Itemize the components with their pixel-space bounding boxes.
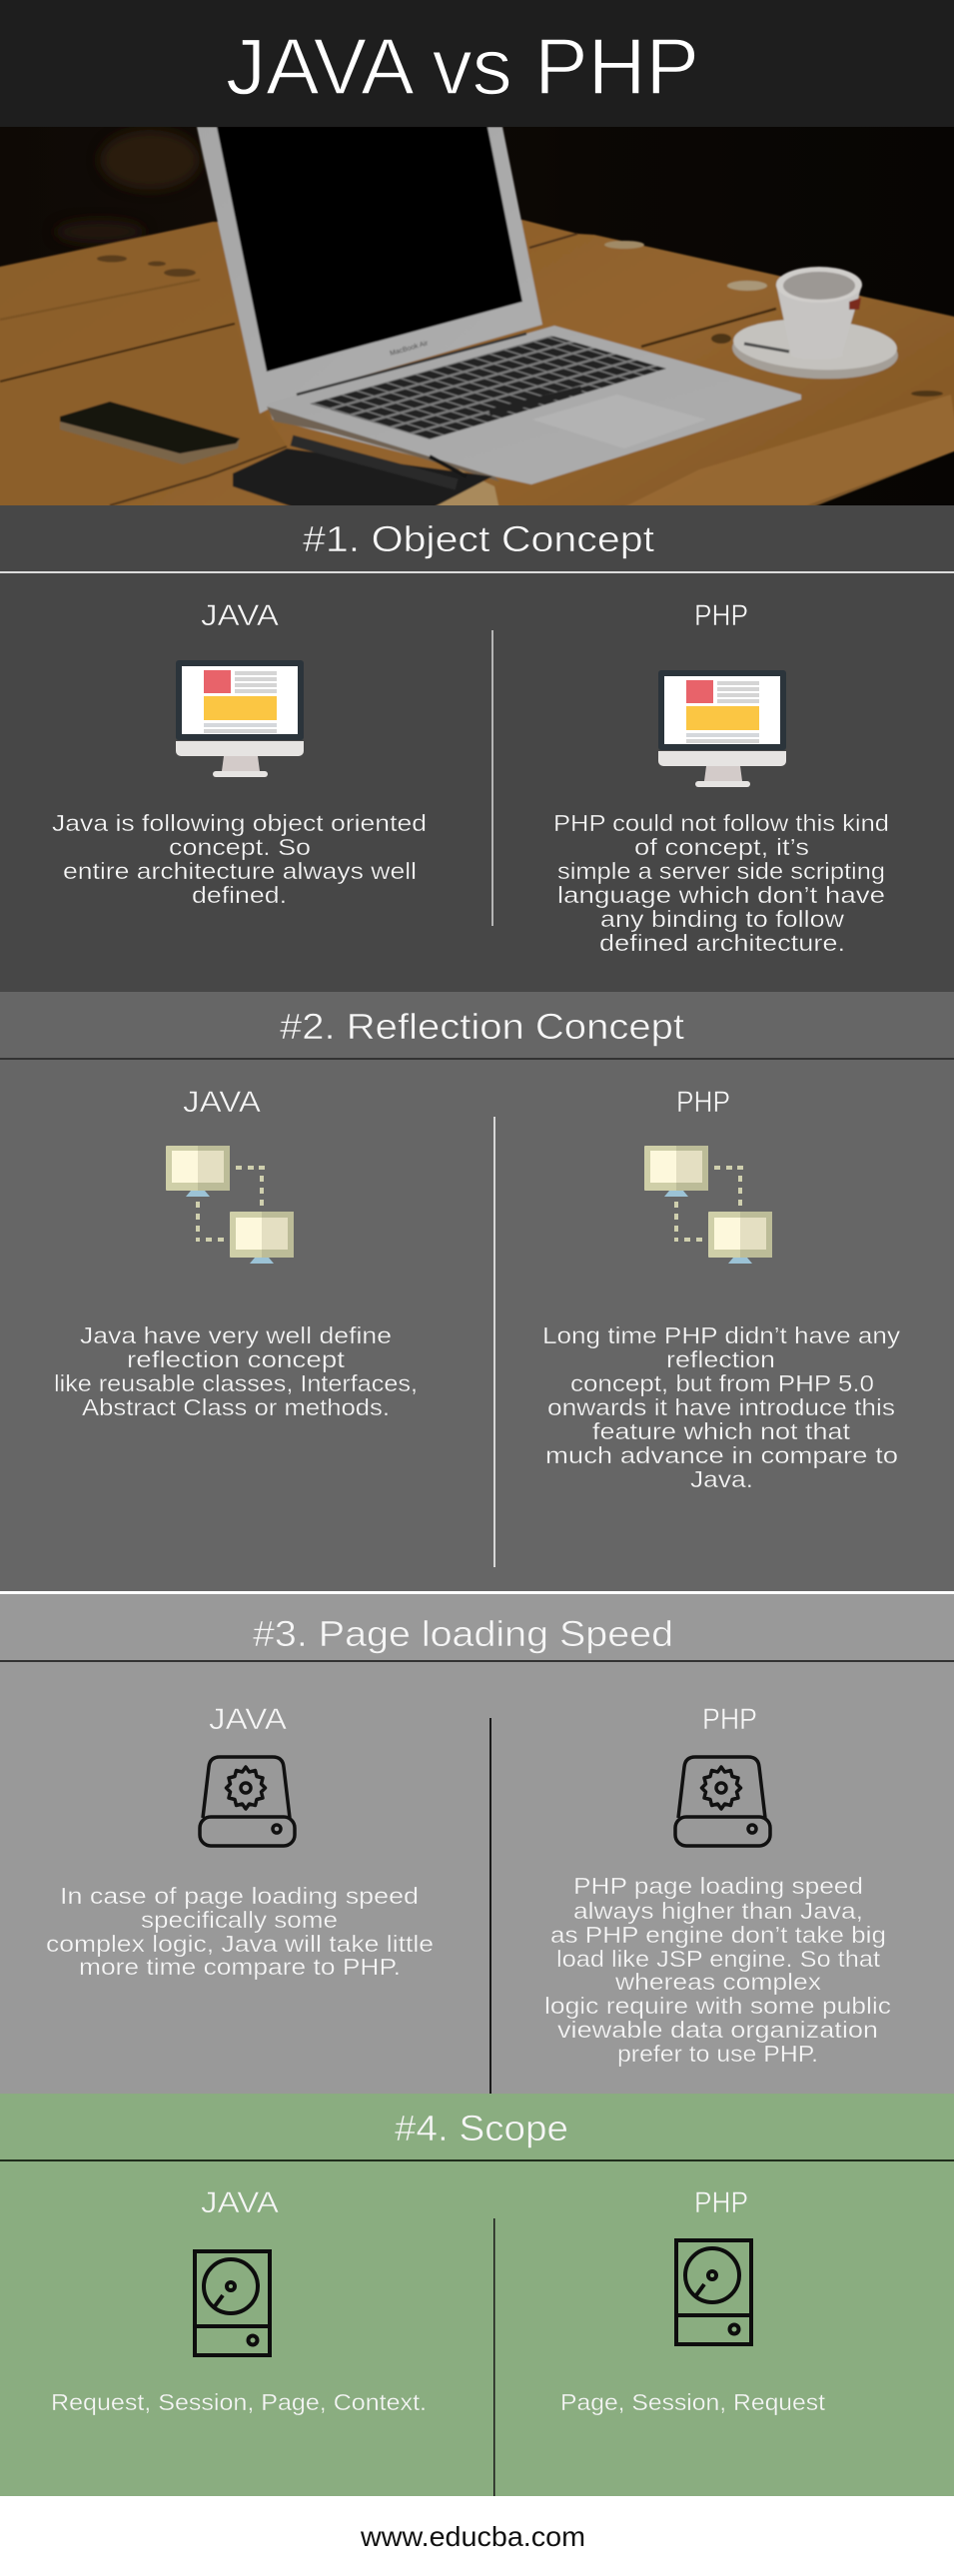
laptop base (267, 326, 801, 484)
java text (52, 810, 427, 908)
heading: #4. Scope (395, 2108, 568, 2148)
php text: as PHP engine don’t take big (550, 1922, 886, 1948)
php text: language which don’t have (557, 882, 885, 908)
java text: like reusable classes, Interfaces, (54, 1370, 418, 1396)
heading: #2. Reflection Concept (280, 1006, 684, 1047)
java text: specifically some (141, 1907, 338, 1933)
java label: JAVA (201, 599, 279, 632)
php text: simple a server side scripting (557, 858, 885, 884)
php text (544, 1873, 891, 2067)
panel: #1 object concept (0, 505, 954, 992)
java label: JAVA (209, 1703, 287, 1736)
php text: feature which not that (592, 1418, 851, 1444)
php text (553, 810, 889, 956)
icon: gear drive php (675, 1757, 770, 1846)
notebook and pen (436, 469, 499, 505)
php label: PHP (694, 2186, 748, 2219)
heading: #1. Object Concept (303, 518, 654, 559)
php label: PHP (676, 1086, 730, 1119)
java text: defined. (192, 882, 287, 908)
hero photo: laptop on wooden table (0, 127, 954, 509)
java text: Java is following object oriented (52, 810, 427, 836)
php text: whereas complex (614, 1969, 822, 1995)
php text: Page, Session, Request (560, 2389, 826, 2415)
icon: networked computers java (166, 1146, 294, 1264)
icon: monitor php (658, 670, 786, 787)
php text: PHP page loading speed (573, 1873, 863, 1899)
icon: networked computers php (644, 1146, 772, 1264)
panel: #2 reflection concept (0, 992, 954, 1591)
php text: concept, but from PHP 5.0 (570, 1370, 874, 1396)
php text: Java. (690, 1466, 753, 1492)
panel: #3 page loading speed (0, 1594, 954, 2094)
php text: always higher than Java, (573, 1898, 863, 1924)
footer url: www.educba.com (360, 2521, 585, 2552)
php text: load like JSP engine. So that (556, 1946, 881, 1972)
java text: Request, Session, Page, Context. (51, 2389, 427, 2415)
java text: In case of page loading speed (60, 1883, 419, 1909)
icon: hard disk php (676, 2240, 751, 2344)
php text: logic require with some public (544, 1993, 891, 2019)
panel: #4 scope (0, 2094, 954, 2496)
icon: gear drive java (200, 1757, 295, 1846)
heading: #3. Page loading Speed (253, 1613, 673, 1654)
java text: Abstract Class or methods. (82, 1394, 390, 1420)
phone (60, 402, 240, 464)
title band (0, 0, 954, 127)
coffee cup (731, 344, 899, 380)
java label: JAVA (183, 1086, 261, 1119)
icon: monitor java (176, 660, 304, 777)
php text: reflection (666, 1346, 775, 1372)
php label: PHP (694, 599, 748, 632)
java text (46, 1883, 434, 1980)
php text: PHP could not follow this kind (553, 810, 889, 836)
java text: complex logic, Java will take little (46, 1931, 434, 1957)
java text: more time compare to PHP. (79, 1954, 401, 1980)
php text: any binding to follow (600, 906, 844, 932)
title: JAVA vs PHP (226, 22, 699, 111)
java text (54, 1322, 418, 1420)
hero photo: laptop on wooden table: MacBook Air (390, 340, 430, 358)
java text: reflection concept (127, 1346, 346, 1372)
php text: prefer to use PHP. (617, 2041, 818, 2067)
php text: of concept, it’s (634, 834, 809, 860)
java text: Java have very well define (80, 1322, 392, 1348)
php text: viewable data organization (557, 2017, 878, 2043)
php text (542, 1322, 901, 1492)
php text: Long time PHP didn’t have any (542, 1322, 901, 1348)
php text: much advance in compare to (545, 1442, 898, 1468)
icon: hard disk java (195, 2251, 270, 2355)
java text: entire architecture always well (63, 858, 417, 884)
java text: concept. So (169, 834, 311, 860)
php label: PHP (702, 1703, 757, 1736)
php text: onwards it have introduce this (547, 1394, 895, 1420)
java label: JAVA (201, 2186, 279, 2219)
laptop screen (197, 127, 542, 414)
php text: defined architecture. (599, 930, 845, 956)
